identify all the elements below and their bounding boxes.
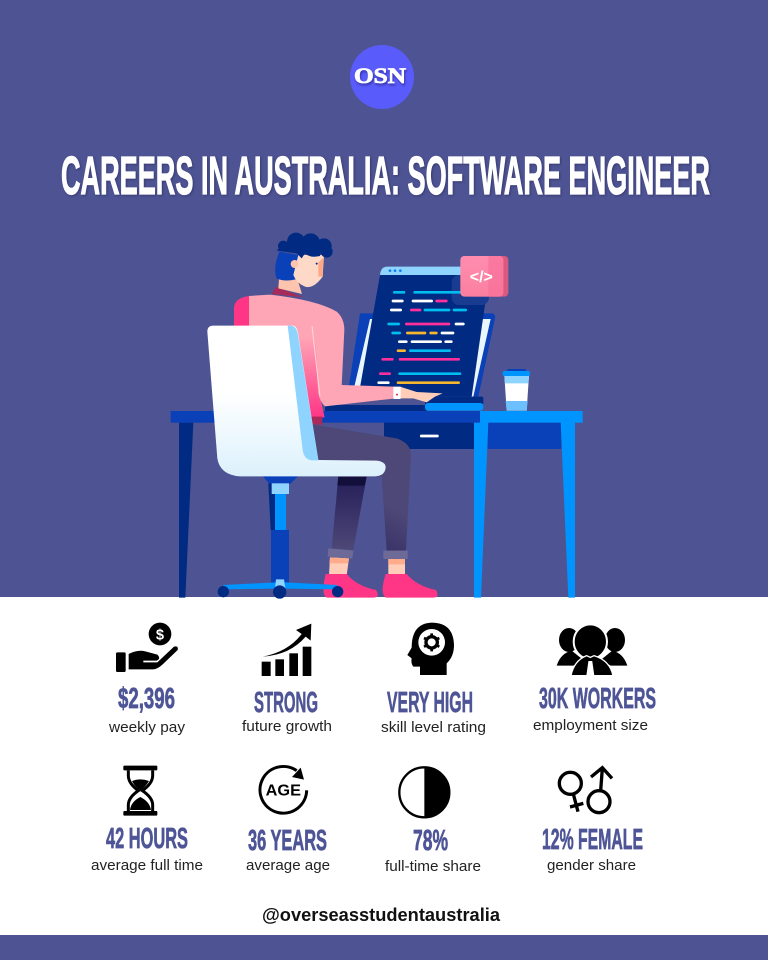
label: weekly pay	[108, 719, 186, 736]
label: employment size	[533, 717, 648, 734]
label: future growth	[242, 718, 332, 735]
value: $2,396	[118, 683, 175, 715]
icon: growth chart	[262, 624, 311, 676]
icon: head with gear	[407, 623, 454, 675]
legs and shoes	[310, 424, 437, 598]
value: VERY HIGH	[387, 687, 473, 719]
label: full-time share	[385, 858, 481, 875]
office chair	[207, 326, 386, 476]
illustration: software engineer at desk	[171, 233, 583, 599]
icon: age cycle: AGE	[266, 783, 301, 800]
stat: skill level	[381, 623, 486, 736]
icon: hourglass	[123, 766, 157, 816]
value: 30K WORKERS	[539, 683, 656, 715]
stat: future growth	[242, 624, 332, 735]
keyboard	[325, 397, 483, 411]
code tag tile	[460, 256, 508, 297]
value: 12% FEMALE	[542, 824, 643, 856]
stat: employment size	[533, 624, 656, 734]
value: 42 HOURS	[106, 823, 188, 855]
icon: half circle	[399, 767, 449, 817]
code tag tile: </>	[470, 269, 493, 286]
icon: group of workers	[557, 624, 627, 676]
logo	[350, 45, 414, 109]
footer band	[0, 935, 768, 960]
value: 36 YEARS	[248, 825, 327, 857]
label: average age	[246, 857, 330, 874]
stat: weekly pay	[108, 623, 186, 736]
icon: gender symbols	[559, 768, 612, 813]
torso and arm	[234, 287, 443, 425]
icon: hand holding coin: $	[156, 627, 164, 643]
head	[275, 233, 333, 294]
monitor	[347, 267, 495, 397]
label: gender share	[547, 857, 636, 874]
stat: average full time	[91, 766, 203, 874]
panel: statistics background	[0, 597, 768, 935]
stat: average age	[246, 766, 330, 874]
label: skill level rating	[381, 719, 486, 736]
code lines	[379, 292, 466, 383]
chair base	[218, 476, 343, 599]
value: STRONG	[254, 687, 318, 719]
logo: OSN	[354, 63, 406, 88]
desk	[171, 411, 583, 598]
label: average full time	[91, 857, 203, 874]
coffee cup	[503, 369, 530, 411]
background: header panel	[0, 0, 768, 598]
value: 78%	[413, 825, 448, 857]
social handle: @overseasstudentaustralia	[262, 905, 501, 925]
stat: full-time share	[385, 767, 481, 875]
stat: gender share	[542, 768, 643, 874]
